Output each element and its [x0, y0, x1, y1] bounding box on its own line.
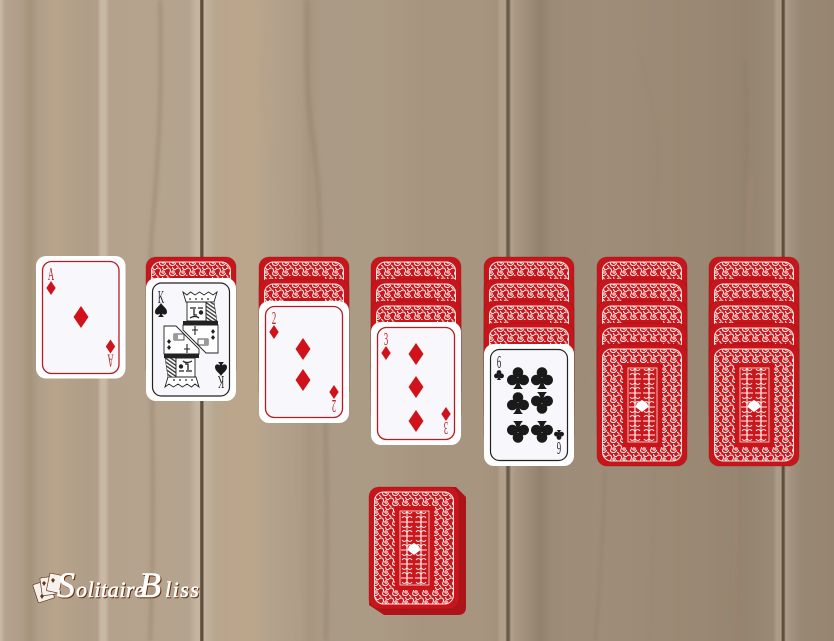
six of clubs: 6 — [497, 353, 501, 373]
three of diamonds: 3 — [384, 330, 388, 350]
king of spades: K — [158, 288, 165, 308]
foundation card: ace of diamonds: A — [48, 265, 55, 285]
icon: fanned cards — [33, 573, 63, 603]
three of diamonds — [371, 322, 461, 445]
three of diamonds: 3 — [444, 417, 448, 437]
wood grain lines — [150, 0, 750, 641]
logo wordmark: B — [139, 565, 161, 605]
column 4: three face-down cards under three of diamonds — [371, 257, 461, 445]
two of diamonds — [259, 301, 349, 423]
column 5: four face-down cards under six of clubs — [484, 257, 574, 466]
logo wordmark: S — [57, 565, 75, 605]
face-down card — [146, 257, 236, 379]
column 3: two face-down cards under two of diamonds — [259, 257, 349, 423]
king of spades: K — [217, 371, 224, 391]
foundation card: ace of diamonds: A — [107, 349, 114, 370]
column 2: one face-down card under king of spades — [146, 257, 236, 401]
six of clubs: 6 — [557, 437, 561, 457]
logo wordmark: olitaire — [76, 577, 145, 602]
two of diamonds: 2 — [272, 309, 276, 329]
Solitaire Bliss logo — [33, 565, 200, 605]
six of clubs — [484, 344, 574, 466]
logo wordmark: liss — [165, 577, 200, 602]
column 6: five face-down cards — [597, 257, 687, 466]
face-down cards — [259, 257, 349, 401]
column 7: five face-down cards — [709, 257, 799, 466]
foundation card: ace of diamonds — [36, 256, 126, 378]
face-down cards — [371, 257, 461, 423]
face-down cards — [484, 257, 574, 445]
two of diamonds: 2 — [332, 395, 336, 415]
stock pile — [369, 487, 466, 615]
king of spades — [146, 278, 236, 401]
